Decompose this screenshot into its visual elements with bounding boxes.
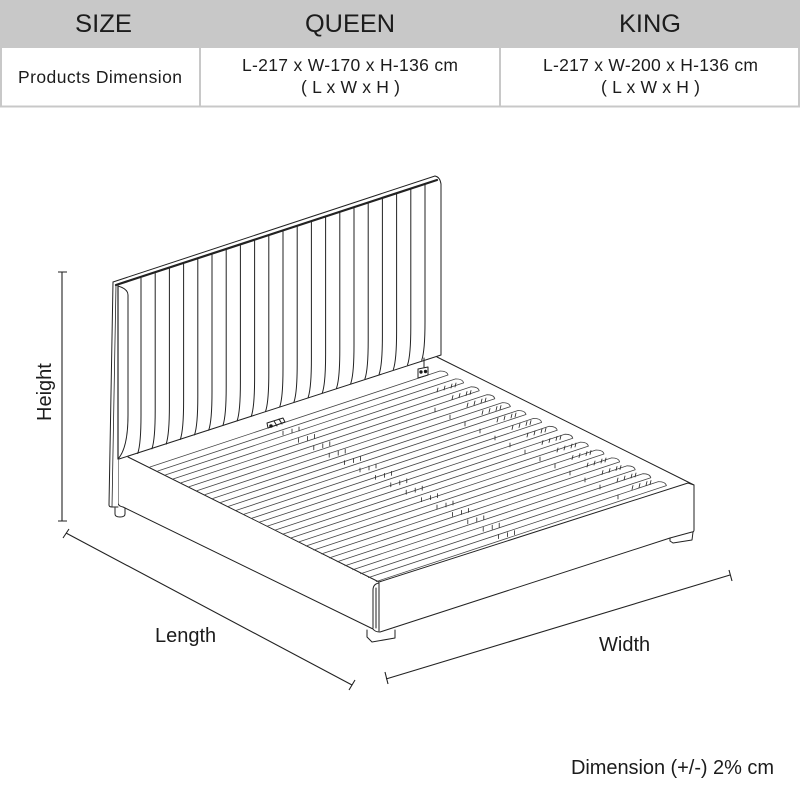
size table <box>0 0 800 107</box>
height dimension line <box>58 272 67 521</box>
width dimension line <box>385 570 732 684</box>
table row borders <box>0 48 800 107</box>
foot: front <box>367 630 395 642</box>
row label: Products Dimension <box>18 67 182 87</box>
foot: right <box>670 532 693 543</box>
header: queen: QUEEN <box>305 10 395 38</box>
slats <box>150 371 666 582</box>
height label: Height <box>34 363 56 421</box>
headboard flutes <box>138 185 425 453</box>
queen dimension key: ( L x W x H ) <box>301 77 400 97</box>
tolerance note: Dimension (+/-) 2% cm <box>571 757 774 779</box>
bed base <box>118 357 694 632</box>
headboard <box>109 176 441 507</box>
length label: Length <box>155 625 216 647</box>
left bracket <box>267 418 285 428</box>
foot: left <box>115 508 125 517</box>
table header band <box>0 0 800 48</box>
slat ties: left row <box>283 427 515 539</box>
width label: Width <box>599 634 650 656</box>
slat ties: right row <box>437 383 651 490</box>
slat ticks: middle row <box>435 408 618 499</box>
king dimension key: ( L x W x H ) <box>601 77 700 97</box>
right bracket <box>418 358 428 378</box>
header: size: SIZE <box>75 10 132 38</box>
bed line drawing <box>109 176 694 642</box>
queen dimensions: L-217 x W-170 x H-136 cm <box>242 55 458 75</box>
length dimension line <box>63 529 355 690</box>
king dimensions: L-217 x W-200 x H-136 cm <box>543 55 758 75</box>
header: king: KING <box>619 10 681 38</box>
